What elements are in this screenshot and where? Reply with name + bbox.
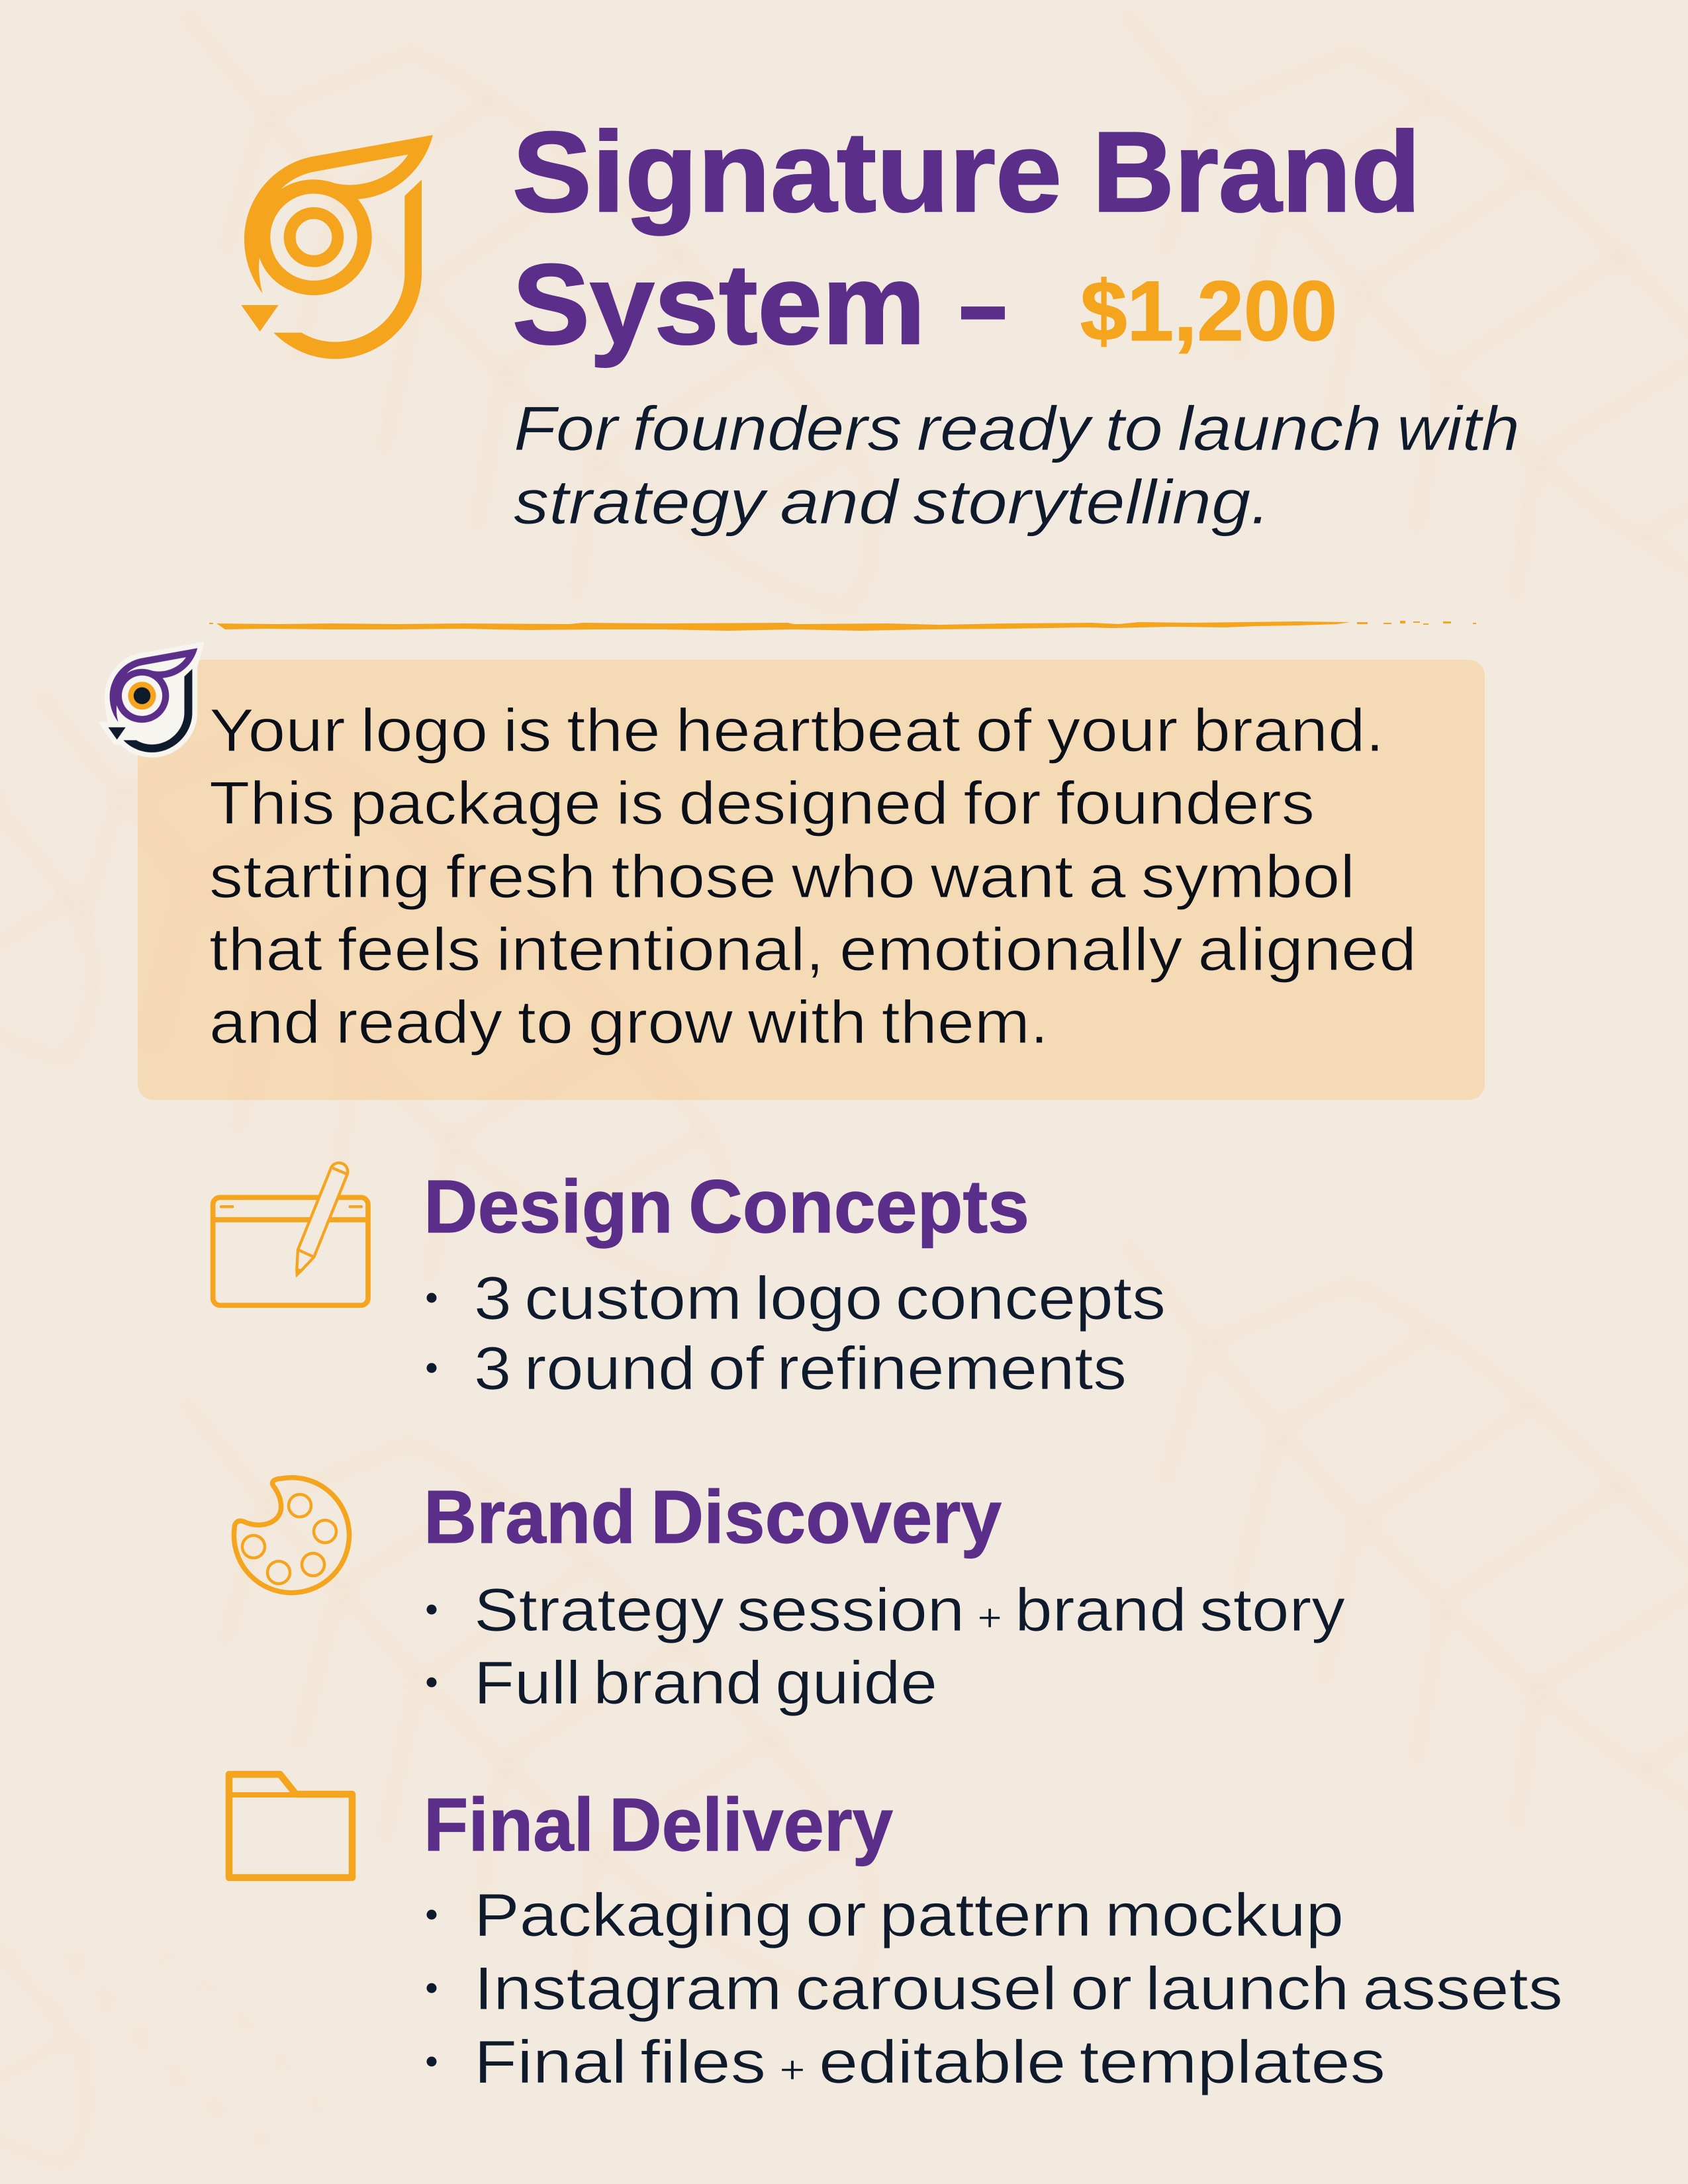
small owl badge	[108, 648, 197, 752]
price: $1,200	[1080, 264, 1337, 359]
icon: window and pencil	[213, 1163, 368, 1305]
title	[512, 109, 1421, 368]
section: final delivery: Final Delivery	[424, 1783, 893, 1866]
section: final delivery: Final files + editable templates	[474, 2028, 1385, 2096]
section: final delivery	[424, 1783, 1563, 2096]
subtitle	[514, 394, 1520, 537]
section: design concepts: 3 round of refinements	[474, 1335, 1127, 1402]
icon: palette	[234, 1478, 349, 1593]
callout text: and ready to grow with them.	[209, 989, 1049, 1056]
title: –	[959, 241, 1007, 368]
subtitle: strategy and storytelling.	[514, 467, 1270, 537]
subtitle: For founders ready to launch with	[514, 394, 1520, 464]
section: brand discovery: Strategy session + brand story	[474, 1576, 1345, 1644]
icon: folder	[229, 1774, 352, 1878]
title: Signature	[512, 109, 1062, 236]
section: brand discovery	[424, 1475, 1345, 1717]
section: final delivery: Instagram carousel or launch assets	[474, 1955, 1563, 2023]
section: design concepts: 3 custom logo concepts	[474, 1265, 1166, 1332]
callout text: starting fresh those who want a symbol	[209, 843, 1355, 911]
logo: orange owl	[241, 135, 433, 359]
callout text	[209, 697, 1417, 1056]
section: brand discovery: Full brand guide	[474, 1649, 937, 1717]
callout box	[138, 660, 1485, 1100]
section: design concepts	[424, 1165, 1166, 1402]
callout text: that feels intentional, emotionally aligned	[209, 916, 1417, 983]
callout text: Your logo is the heartbeat of your brand.	[209, 697, 1384, 764]
section: brand discovery: Brand Discovery	[424, 1475, 1002, 1559]
callout text: This package is designed for founders	[209, 770, 1315, 837]
brush divider	[209, 621, 1476, 631]
section: design concepts: Design Concepts	[424, 1165, 1029, 1248]
section: final delivery: Packaging or pattern mockup	[474, 1882, 1344, 1949]
title: System	[512, 241, 925, 368]
title: Brand	[1092, 109, 1421, 236]
